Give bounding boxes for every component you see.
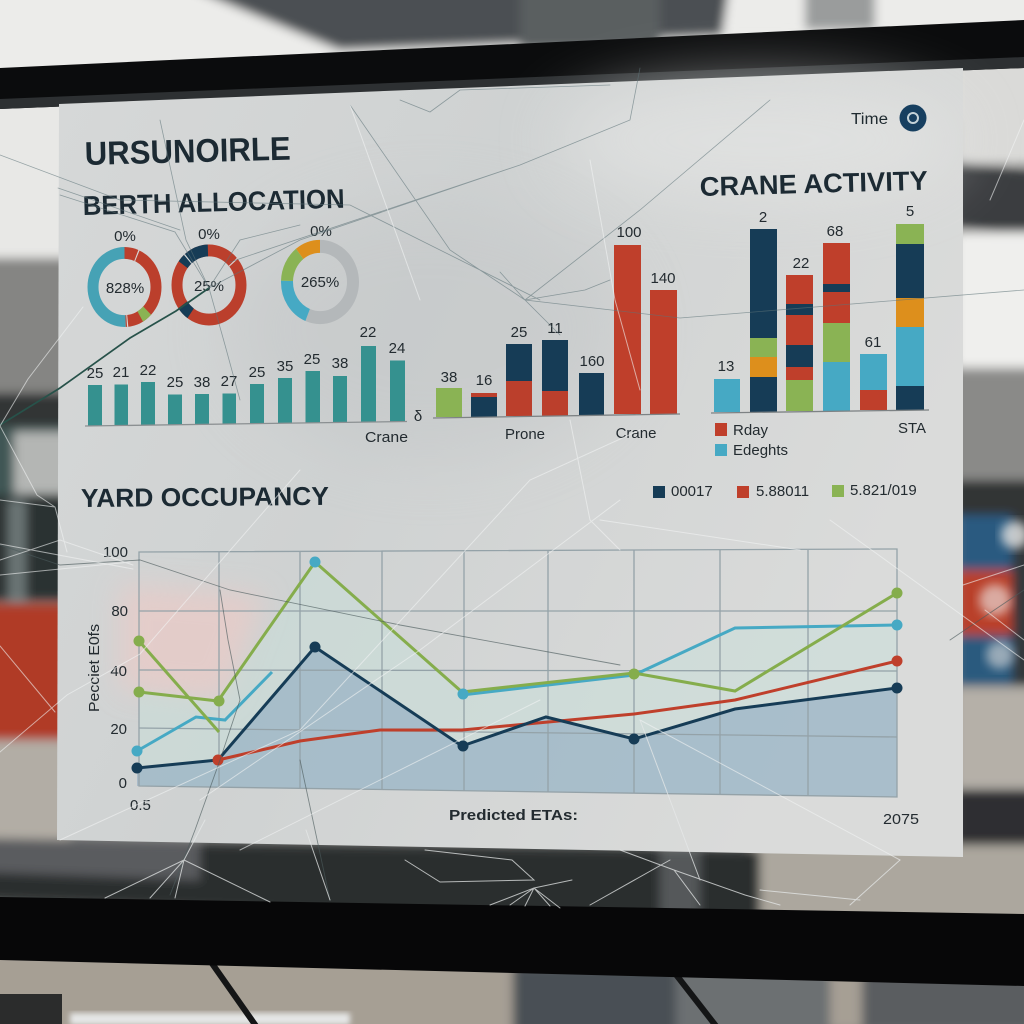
bar chart: crane activity stacked: 22 bbox=[793, 255, 809, 272]
series: red bbox=[218, 661, 897, 760]
axis labels bbox=[86, 544, 919, 828]
donut chart 1 bbox=[93, 228, 156, 321]
legend: crane activity bbox=[715, 422, 788, 459]
legend: crane activity: Edeghts bbox=[733, 442, 788, 459]
bar chart: crane activity stacked: 68 bbox=[827, 223, 843, 240]
title: URSUNOIRLE bbox=[84, 130, 291, 172]
data points bbox=[132, 556, 902, 774]
donut chart 3: 265% bbox=[301, 274, 339, 291]
axis labels: 100 bbox=[103, 544, 128, 561]
series: teal bbox=[137, 625, 897, 751]
bar chart: crane activity stacked: 2 bbox=[759, 209, 767, 226]
monitor frame: top bar bbox=[0, 20, 1024, 109]
bar chart: mixed middle: 160 bbox=[579, 353, 605, 370]
bar chart: berth allocation: 25 bbox=[304, 351, 320, 368]
axis labels: Predicted ETAs: bbox=[449, 807, 578, 824]
axis labels: 2075 bbox=[883, 811, 919, 828]
legend: yard occupancy bbox=[653, 482, 917, 500]
bar chart: berth allocation: 38 bbox=[194, 374, 210, 391]
area fills bbox=[120, 562, 897, 797]
bar chart: mixed middle: Crane bbox=[616, 425, 656, 442]
legend: yard occupancy: 5.821/019 bbox=[850, 482, 917, 499]
bar chart: berth allocation: 24 bbox=[389, 340, 405, 357]
heading: crane activity: CRANE ACTIVITY bbox=[699, 166, 928, 202]
bar chart: mixed middle: 25 bbox=[511, 324, 527, 341]
bar chart: berth allocation bbox=[85, 324, 422, 446]
donut chart 3 bbox=[287, 223, 353, 318]
axis labels: 0.5 bbox=[130, 797, 151, 814]
monitor frame: bottom bar bbox=[0, 897, 1024, 986]
donut chart 3: 0% bbox=[310, 223, 332, 240]
line chart: yard occupancy bbox=[86, 544, 919, 828]
legend: yard occupancy: 5.88011 bbox=[756, 483, 809, 500]
bar chart: berth allocation: 38 bbox=[332, 355, 348, 372]
bar chart: crane activity stacked: 13 bbox=[718, 358, 734, 375]
axis labels: Pecciet E0fs bbox=[86, 624, 103, 712]
bar chart: berth allocation: 25 bbox=[249, 364, 265, 381]
legend: yard occupancy: 00017 bbox=[671, 483, 713, 500]
axis labels: 80 bbox=[111, 603, 128, 620]
axis labels: 40 bbox=[110, 663, 127, 680]
donut chart 1: 0% bbox=[114, 228, 136, 245]
bar chart: berth allocation: δ bbox=[414, 408, 422, 425]
donut chart 2: 25% bbox=[194, 278, 224, 295]
time indicator: Time bbox=[851, 111, 888, 128]
series: navy bbox=[137, 647, 897, 768]
bar chart: mixed middle: 140 bbox=[650, 270, 676, 287]
bar chart: berth allocation: 22 bbox=[140, 362, 156, 379]
bar chart: crane activity stacked: 5 bbox=[906, 203, 914, 220]
bar chart: crane activity stacked: STA bbox=[898, 420, 926, 437]
bar chart: mixed middle: 100 bbox=[616, 224, 642, 241]
bar chart: berth allocation: 35 bbox=[277, 358, 293, 375]
bar chart: berth allocation: 25 bbox=[167, 374, 183, 391]
bar chart: mixed middle: 16 bbox=[476, 372, 492, 389]
bar chart: mixed middle bbox=[433, 224, 680, 443]
heading: berth allocation: BERTH ALLOCATION bbox=[82, 184, 345, 221]
bar chart: berth allocation: 27 bbox=[221, 373, 237, 390]
donut chart 2: 0% bbox=[198, 226, 220, 243]
shatter: bottom edge bbox=[105, 720, 900, 908]
time indicator bbox=[851, 104, 926, 132]
bar chart: mixed middle: 38 bbox=[441, 369, 457, 386]
axis labels: 20 bbox=[110, 721, 127, 738]
legend: crane activity: Rday bbox=[733, 422, 769, 439]
dashboard panel bbox=[57, 68, 963, 857]
bar chart: crane activity stacked: 61 bbox=[865, 334, 881, 351]
bar chart: berth allocation: 21 bbox=[113, 364, 129, 381]
donut chart 2 bbox=[177, 226, 241, 320]
donut chart 1: 828% bbox=[106, 280, 144, 297]
series: green bbox=[139, 562, 897, 732]
bar chart: mixed middle: Prone bbox=[505, 426, 545, 443]
bar chart: berth allocation: 25 bbox=[87, 365, 103, 382]
axis labels: 0 bbox=[119, 775, 127, 792]
bar chart: berth allocation: 22 bbox=[360, 324, 376, 341]
bar chart: berth allocation: Crane bbox=[365, 429, 408, 446]
heading: yard occupancy: YARD OCCUPANCY bbox=[81, 481, 329, 513]
bar chart: crane activity stacked bbox=[711, 203, 929, 437]
bar chart: mixed middle: 11 bbox=[547, 320, 563, 337]
